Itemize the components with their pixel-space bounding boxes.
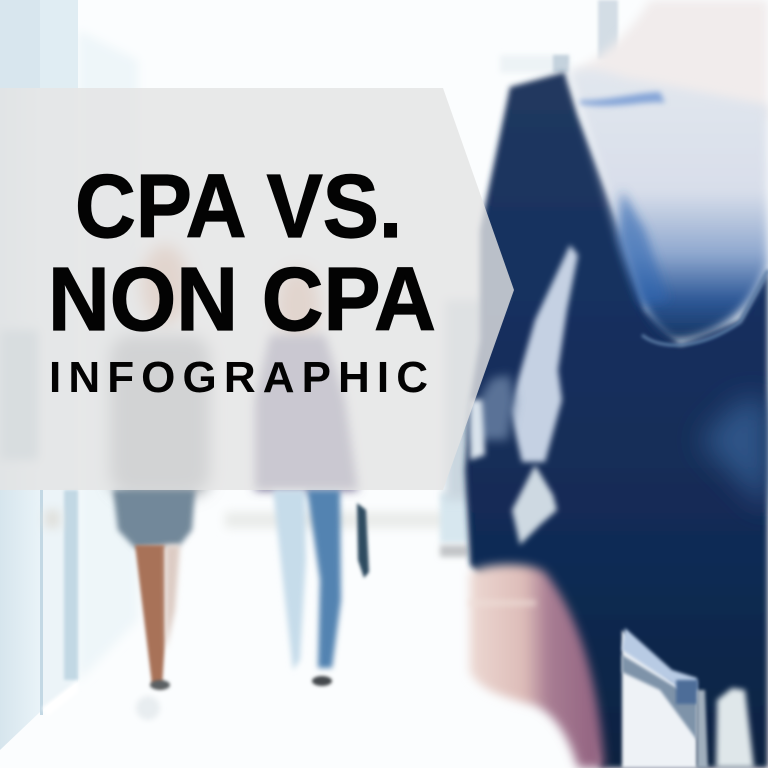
subtitle: INFOGRAPHIC [49, 353, 435, 402]
left woman walking [110, 245, 210, 720]
title line 1: CPA VS. [75, 157, 402, 257]
man in navy suit [465, 0, 768, 768]
hand holding bag [468, 564, 605, 768]
center woman walking [255, 269, 369, 686]
title line 2: NON CPA [48, 250, 436, 350]
